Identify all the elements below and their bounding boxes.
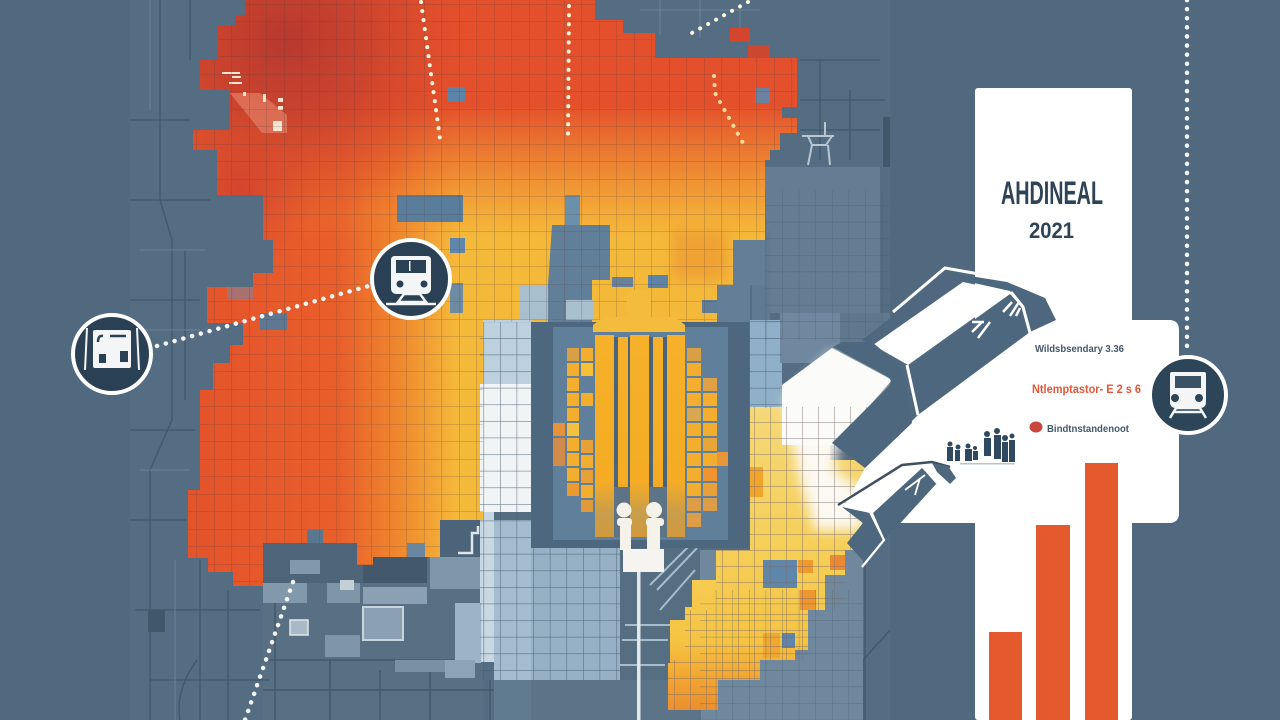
crowd of people <box>947 428 1015 464</box>
small ribbon face <box>873 468 937 540</box>
small ribbon arrow mark <box>905 475 925 495</box>
heat map: pale blue cells beside building <box>483 320 531 386</box>
heat map: upper red-orange band <box>352 0 797 224</box>
building roof <box>593 290 685 332</box>
ribbon face <box>908 294 1030 415</box>
chart year: 2021 <box>1029 218 1074 243</box>
white cells by ribbon <box>782 348 892 445</box>
heat map: red left edge <box>217 162 284 230</box>
ribbon left band <box>832 342 912 468</box>
heat map: lower-right yellow region <box>668 407 868 710</box>
legend label: Bindtnstandenoot <box>1047 423 1129 435</box>
central building <box>531 290 749 548</box>
small ribbon left band <box>842 507 885 563</box>
building right cell column <box>687 348 728 527</box>
icon: train centre <box>372 240 450 318</box>
ribbon cap <box>945 272 1056 332</box>
heat map: white centre cells <box>480 384 531 512</box>
small ribbon fold line <box>862 466 937 567</box>
figure right <box>646 502 664 550</box>
cable <box>637 572 640 720</box>
plug with two figures <box>616 502 664 720</box>
heat map: orange patch right <box>672 230 728 280</box>
building central yellow columns <box>595 335 685 537</box>
map specks on red area <box>222 72 283 131</box>
building left cell column <box>553 348 593 512</box>
building outer frame <box>531 322 749 548</box>
slate backing <box>862 272 965 345</box>
small ribbon dark top edge <box>838 462 950 505</box>
legend marker <box>1030 422 1042 432</box>
ribbon white strip <box>873 282 1010 365</box>
figure left <box>616 502 632 550</box>
heat map: main region <box>188 0 797 586</box>
street map base <box>130 0 890 720</box>
small ribbon cap <box>932 463 956 484</box>
heat map grid lines <box>188 0 798 586</box>
map tiles: lower pale blue cells <box>263 512 863 720</box>
heat map: dark red top-left <box>193 0 422 182</box>
heat map: slate gaps and accent cells <box>227 28 845 658</box>
chart title: AHDINEAL <box>1001 175 1103 211</box>
white glow in yellow region <box>785 352 890 530</box>
plug body <box>623 549 664 572</box>
small ribbon white strip <box>845 463 932 513</box>
map icon: pale machine top right <box>802 122 834 165</box>
ribbon arrows <box>972 302 1020 338</box>
map tiles: right side grey cells <box>750 167 890 408</box>
ribbon outer line <box>893 268 1007 312</box>
legend row 2: Ntlemptastor- E 2 s 6 <box>1032 384 1141 396</box>
white chart panel <box>845 88 1179 720</box>
pale cell grid lines <box>480 190 890 720</box>
building inner panel <box>553 327 728 540</box>
column slits <box>614 337 667 537</box>
icon: train right <box>1150 357 1226 433</box>
legend row 3 <box>1030 422 1129 435</box>
bar chart <box>989 463 1118 720</box>
small ribbon arrow <box>838 462 956 567</box>
stair mark <box>458 526 478 553</box>
panel column <box>975 88 1132 720</box>
legend row 1: Wildsbsendary 3.36 <box>1035 343 1124 355</box>
panel legend box <box>845 320 1179 540</box>
ribbon fold line <box>907 292 1030 415</box>
icon: station left <box>73 315 151 393</box>
large ribbon arrow <box>832 268 1056 468</box>
